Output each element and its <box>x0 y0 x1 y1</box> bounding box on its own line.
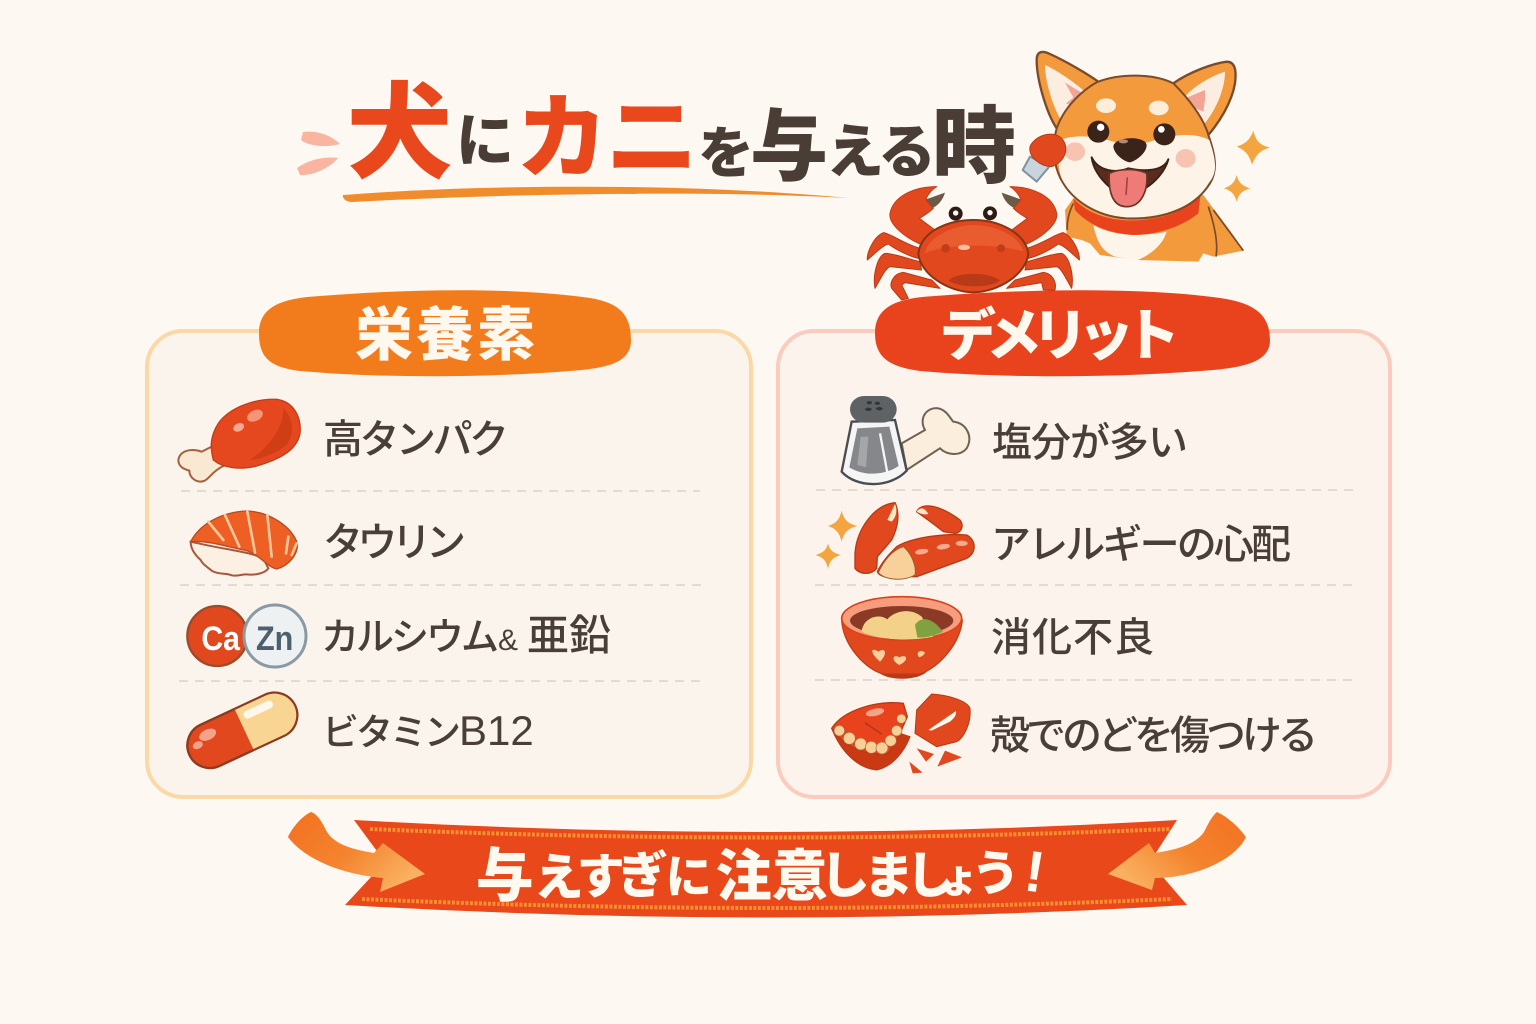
icon: capsule <box>180 685 305 776</box>
title text: 時 <box>932 100 1016 194</box>
icon: Ca and Zn minerals: Zn <box>256 620 293 658</box>
banner text: 意 <box>772 845 828 908</box>
dog collar <box>1073 193 1201 235</box>
panel frame <box>778 331 1390 797</box>
icon: meat drumstick <box>178 399 300 482</box>
icon: Ca and Zn minerals: Ca <box>201 620 241 658</box>
dog nose <box>1113 138 1147 162</box>
banner text: ! <box>1021 839 1049 906</box>
banner text: ょ <box>939 857 979 901</box>
title underline <box>343 187 848 202</box>
title text: カ <box>516 88 608 190</box>
banner text: 与 <box>476 844 534 909</box>
title accent marks <box>297 132 340 175</box>
banner text: え <box>534 850 584 906</box>
label: 消化不良 <box>991 616 1154 660</box>
arrow: left <box>288 812 425 892</box>
title text: る <box>878 120 936 185</box>
label: 亜鉛 <box>527 612 611 659</box>
crab illustration <box>867 187 1079 300</box>
arrow: right <box>1108 812 1246 890</box>
item: allergy concern <box>815 503 1291 579</box>
dog cheeks <box>1065 142 1085 161</box>
item: high salt <box>842 396 1188 484</box>
icon: sushi <box>191 511 297 576</box>
title text: に <box>456 109 514 174</box>
ribbon <box>345 820 1187 918</box>
label: 高タンパク <box>323 418 509 462</box>
heading pill: nutrients: 栄養素 <box>355 303 535 368</box>
dog eyes <box>1087 121 1175 145</box>
icon: bowl <box>842 597 962 679</box>
label: カルシウム <box>321 617 497 659</box>
heading pill: nutrients <box>259 290 631 376</box>
item: high protein <box>178 399 509 482</box>
item: vitamin B12 <box>180 685 534 776</box>
item: indigestion <box>842 597 1154 679</box>
banner text: う <box>972 848 1020 901</box>
banner text: し <box>820 848 870 904</box>
banner text: す <box>577 851 625 904</box>
title text: え <box>826 120 884 185</box>
icon: crab legs and sparkles <box>815 503 974 579</box>
crab claws <box>890 187 1057 244</box>
icon: salt shaker and bone <box>842 396 969 484</box>
banner text: ぎ <box>618 848 668 904</box>
title <box>297 76 1016 202</box>
crab shell <box>918 220 1028 292</box>
item: taurine <box>191 511 466 576</box>
panel: drawbacks <box>778 290 1390 797</box>
label: B12 <box>459 707 534 754</box>
label: タウリン <box>323 521 466 565</box>
title text: を <box>698 122 754 185</box>
banner text: に <box>666 851 712 903</box>
dog head <box>1054 76 1215 219</box>
label: アレルギーの心配 <box>991 523 1291 567</box>
panel: nutrients <box>147 290 751 797</box>
item: shell injures throat <box>832 694 1318 773</box>
dog illustration <box>1023 52 1270 262</box>
crab claw held by dog <box>1023 134 1066 182</box>
crab eyes <box>949 206 997 221</box>
label: 塩分が多い <box>992 421 1188 465</box>
dog brow spots <box>1096 98 1116 113</box>
banner text: ま <box>864 848 914 904</box>
sparkles <box>1224 131 1270 202</box>
heading pill: drawbacks: デメリット <box>940 304 1180 367</box>
label: 殻でのどを傷つける <box>990 714 1318 758</box>
dog mouth and tongue <box>1092 157 1168 207</box>
title text: 犬 <box>347 76 452 193</box>
label: ビタミン <box>322 712 459 753</box>
title text: 与 <box>750 103 828 191</box>
banner text: 注 <box>716 845 772 908</box>
heading pill: drawbacks <box>875 290 1270 376</box>
crab pincer tips <box>926 193 945 209</box>
icon: Ca and Zn minerals <box>187 605 306 667</box>
icon: broken crab shell <box>832 694 970 773</box>
banner: caution <box>288 812 1246 918</box>
dog body <box>1065 195 1243 262</box>
dog ears <box>1037 52 1236 135</box>
title text: ニ <box>606 88 698 190</box>
banner text: し <box>906 848 956 904</box>
panel frame <box>147 331 751 797</box>
item: calcium and zinc <box>187 605 611 667</box>
label: & <box>498 624 518 657</box>
crab legs <box>867 233 1079 300</box>
